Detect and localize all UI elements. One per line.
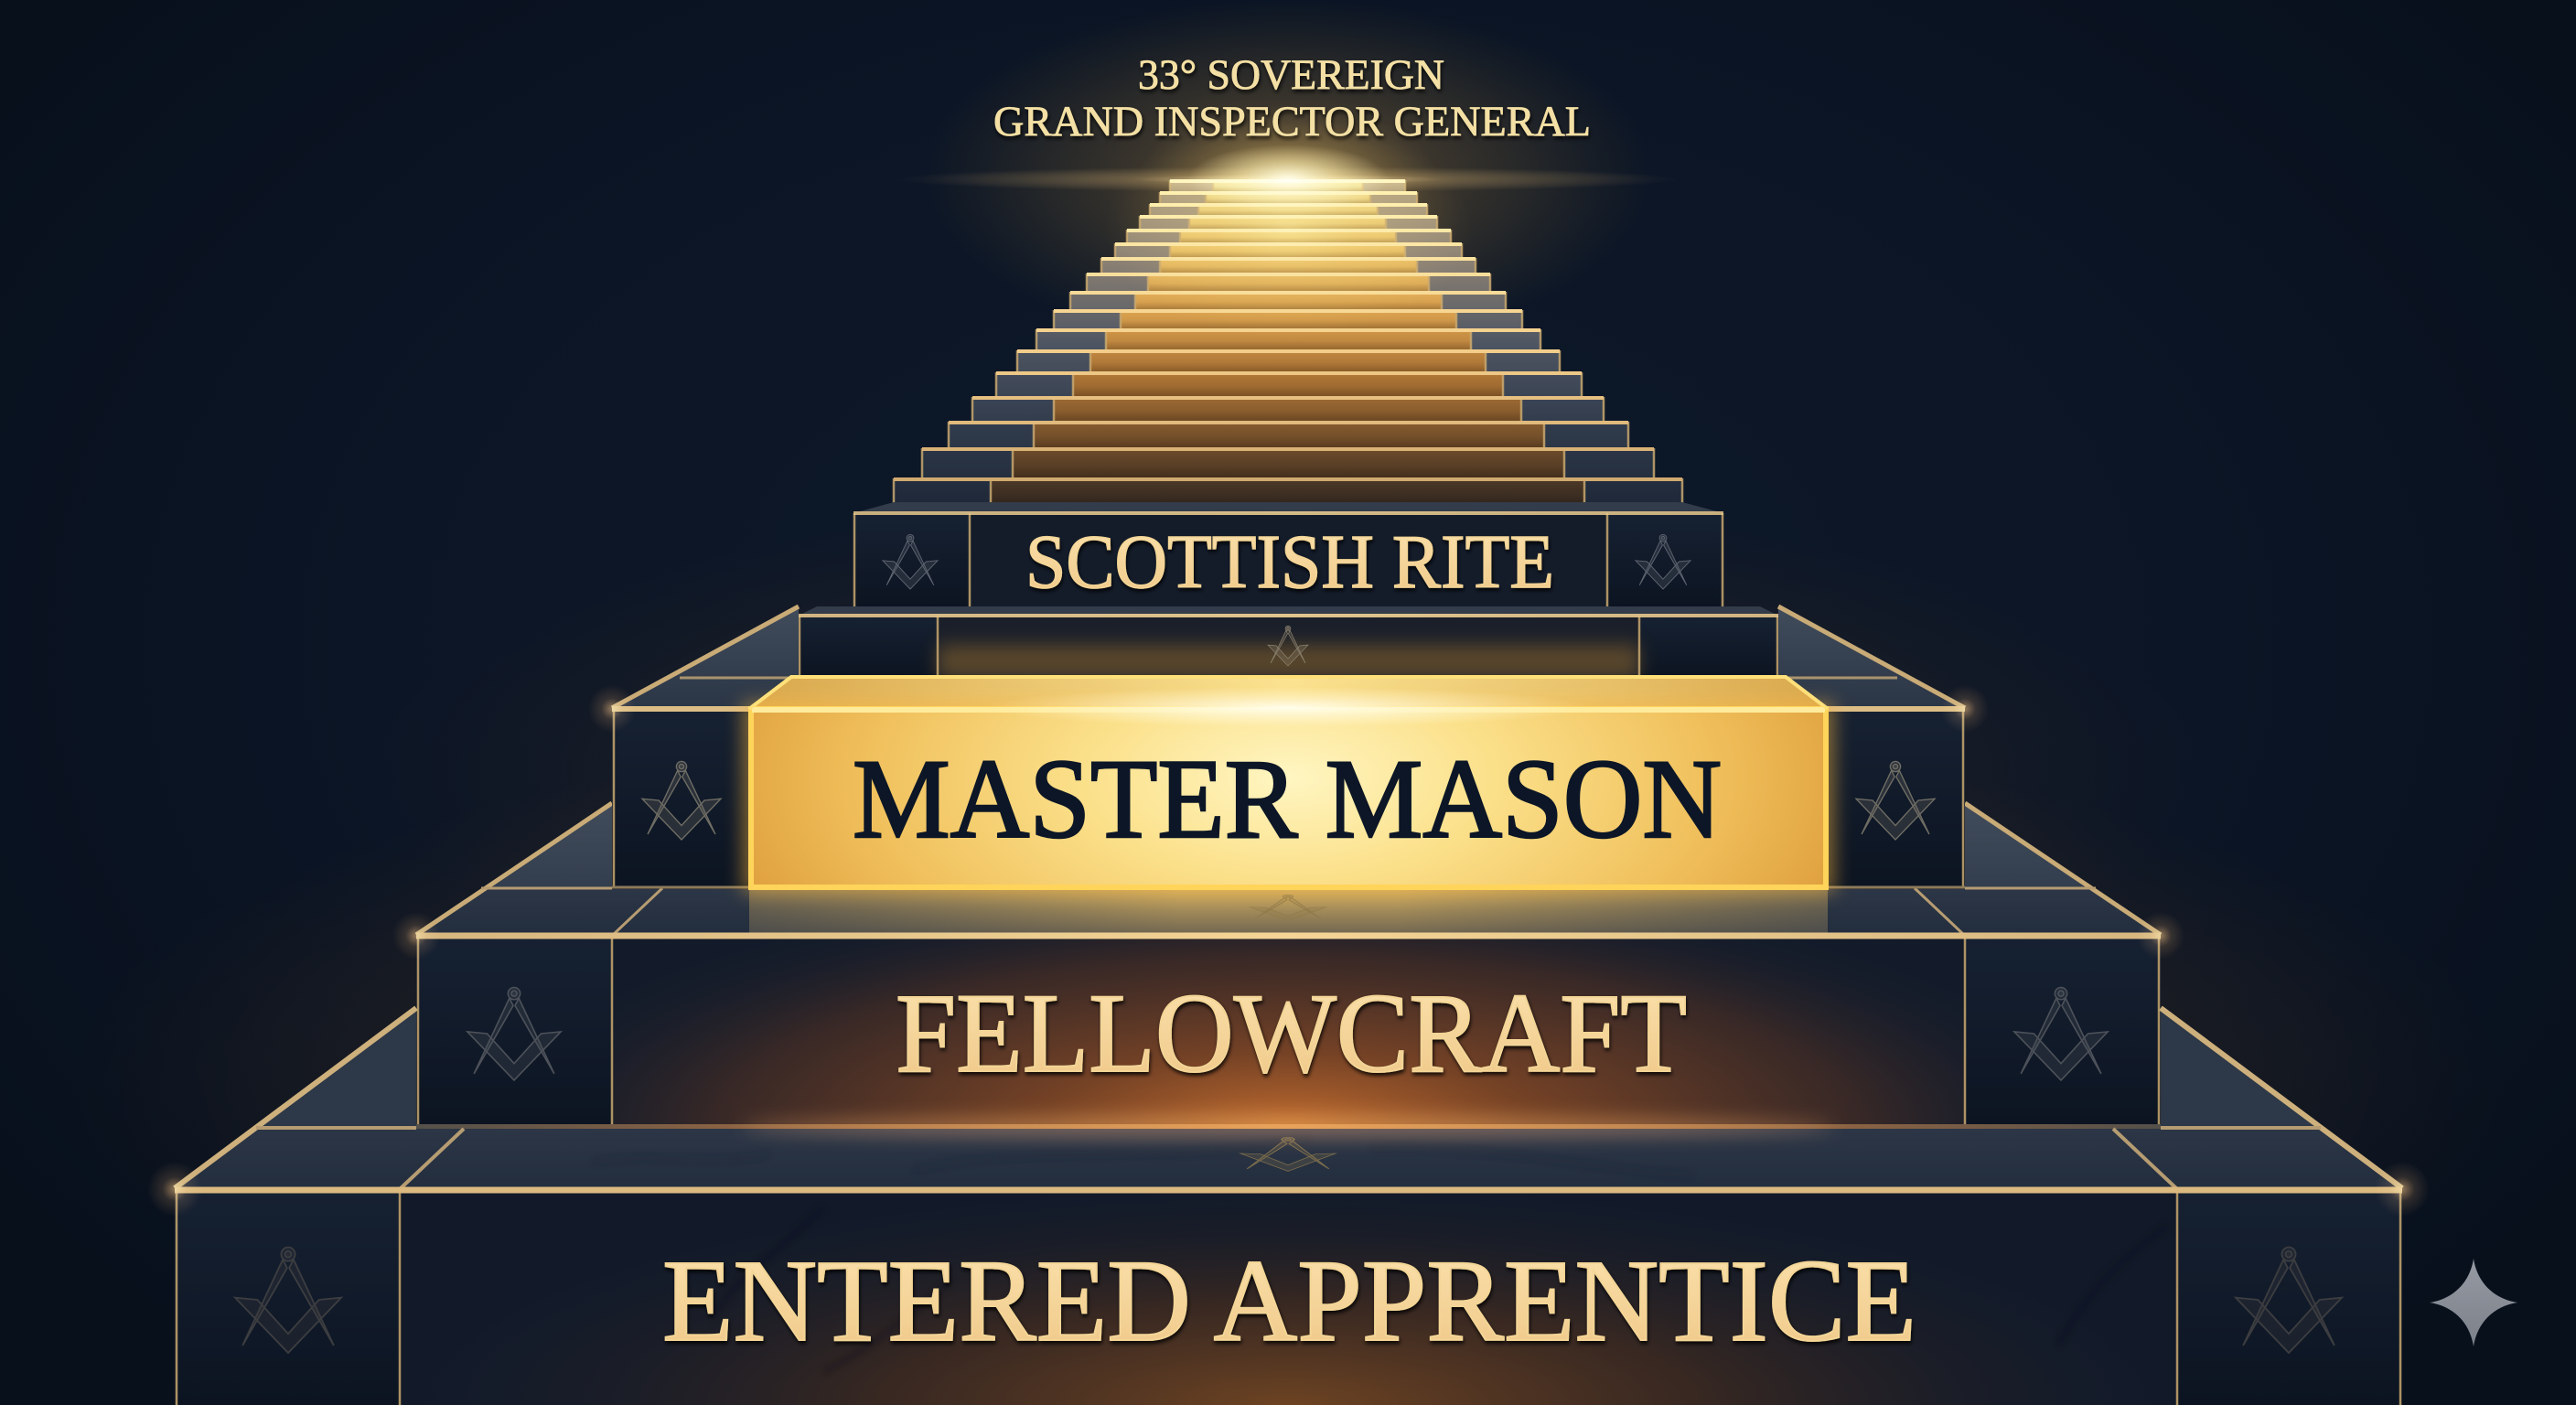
step: plinth above Master Mason	[799, 606, 1778, 678]
icon: square and compass left	[467, 988, 561, 1080]
title: 33 degree: 33° SOVEREIGN	[1138, 51, 1444, 99]
label: Scottish Rite: SCOTTISH RITE	[1025, 520, 1554, 605]
step: Entered Apprentice top ledge	[175, 1008, 2402, 1189]
icon: square and compass right	[2236, 1248, 2342, 1353]
label: Fellowcraft: FELLOWCRAFT	[896, 971, 1687, 1096]
icon: four-point sparkle watermark	[2430, 1259, 2517, 1346]
marble veins on ledge	[595, 1139, 1692, 1175]
staircase of upper degrees	[894, 180, 1682, 509]
corner glints	[147, 685, 2430, 1217]
icon: flattened square and compass	[1250, 895, 1326, 921]
step: Entered Apprentice	[175, 1189, 2402, 1405]
label: Entered Apprentice: ENTERED APPRENTICE	[662, 1236, 1916, 1366]
stair light bloom	[895, 119, 1681, 338]
icon: square and compass left	[642, 761, 721, 840]
step: Scottish Rite	[853, 502, 1723, 607]
title: 33 degree: GRAND INSPECTOR GENERAL	[993, 98, 1591, 145]
marble veins on front	[714, 1207, 2168, 1372]
step: Master Mason (highlighted)	[612, 677, 1965, 893]
title: 33 degree	[993, 51, 1591, 145]
icon: square and compass left	[883, 534, 938, 589]
step: Fellowcraft	[416, 936, 2161, 1127]
icon: square and compass right	[2014, 988, 2108, 1080]
icon: flattened square and compass	[1240, 1137, 1336, 1171]
icon: square and compass right	[1856, 761, 1935, 840]
icon: square and compass right	[1636, 534, 1690, 589]
icon: square and compass left	[235, 1248, 341, 1353]
ambient glow behind steps	[71, 494, 2505, 1405]
label: Master Mason: MASTER MASON	[853, 736, 1722, 862]
step: Fellowcraft top ledge	[416, 803, 2161, 936]
top glow behind stairs	[922, 0, 1654, 348]
side ledges of Master Mason step	[612, 606, 1965, 709]
icon: square and compass on plinth	[1268, 626, 1308, 666]
